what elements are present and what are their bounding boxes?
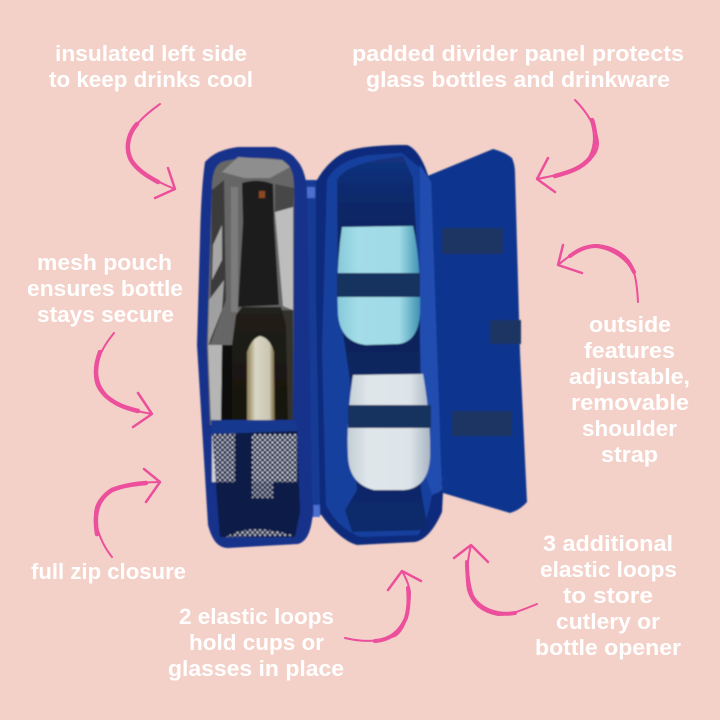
lining highlights [208, 157, 294, 424]
arrow: padded divider panel [537, 100, 598, 192]
left compartment [197, 147, 314, 548]
strap loop bottom [452, 411, 512, 436]
label: mesh pouch [27, 250, 183, 327]
label: mesh pouch: ensures bottle [27, 276, 183, 301]
label: insulated left side: insulated left side [55, 41, 247, 66]
arrow: 2 elastic loops [345, 571, 421, 641]
label: outside strap: removable [571, 390, 689, 415]
right compartment [316, 145, 443, 545]
arrow: full zip [95, 469, 160, 557]
label: padded divider panel: glass bottles and drinkware [366, 67, 670, 92]
label: 2 elastic loops: 2 elastic loops [179, 604, 334, 629]
label: outside strap: outside [589, 312, 671, 337]
label: outside strap: adjustable, [569, 364, 690, 389]
label: outside strap: strap [601, 442, 658, 467]
label: insulated left side [49, 41, 253, 92]
arrow: 3 additional loops [454, 545, 537, 615]
label: 2 elastic loops [168, 604, 344, 681]
centre zip [303, 180, 329, 517]
mesh pouch [211, 420, 300, 537]
label: 2 elastic loops: glasses in place [168, 656, 344, 681]
label: mesh pouch: mesh pouch [37, 250, 172, 275]
label: outside strap [569, 312, 690, 467]
label: 3 additional elastic loops [535, 531, 681, 660]
strap loop middle [490, 320, 521, 344]
label: 2 elastic loops: hold cups or [189, 630, 324, 655]
product photo: open cooler bag [197, 145, 527, 548]
flap panel with strap loops [425, 149, 527, 513]
arrow: mesh pouch [95, 333, 152, 427]
blue cup with band [337, 226, 420, 345]
arrow: insulated left side [127, 104, 175, 198]
label: padded divider panel: padded divider panel protects [352, 41, 684, 66]
strap loop top [442, 228, 503, 254]
silver insulated lining [207, 158, 294, 425]
wine bottle [232, 181, 288, 424]
label: mesh pouch: stays secure [37, 302, 174, 327]
label: 3 additional elastic loops: 3 additional [543, 531, 673, 556]
label: full zip closure: full zip closure [31, 559, 186, 584]
label: insulated left side: to keep drinks cool [49, 67, 253, 92]
label: 3 additional elastic loops: elastic loops [540, 557, 677, 582]
white cup with band [348, 374, 431, 490]
arrow: outside strap [558, 245, 638, 302]
label: outside strap: features [584, 338, 675, 363]
label: 3 additional elastic loops: cutlery or [556, 609, 660, 634]
label: 3 additional elastic loops: to store [563, 583, 653, 608]
label: outside strap: shoulder [582, 416, 677, 441]
label: padded divider panel [352, 41, 684, 92]
label: 3 additional elastic loops: bottle opener [535, 635, 681, 660]
